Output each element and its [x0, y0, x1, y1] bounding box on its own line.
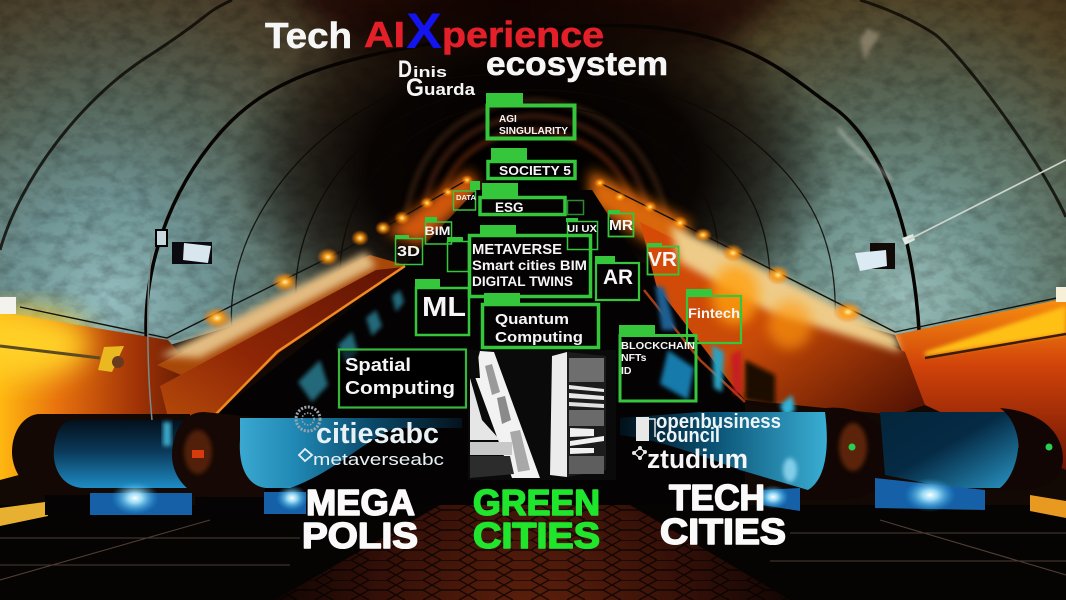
- small empty box left of Metaverse: [447, 237, 468, 272]
- author: Dinis Guarda: inis: [413, 64, 447, 81]
- box: Metaverse: DIGITAL TWINS: [472, 274, 573, 289]
- box: Metaverse: METAVERSE: [472, 241, 562, 258]
- centre hex paving: [275, 505, 790, 600]
- white wall light right edge: [1056, 287, 1066, 302]
- escalator unit 4: [875, 408, 1063, 512]
- left red escalator panel: [160, 267, 404, 425]
- far orange tunnel rings: [405, 100, 668, 222]
- left escalator rail: [216, 266, 405, 414]
- box: Fintech: Fintech: [688, 305, 740, 321]
- outer arch rib: [0, 0, 1066, 250]
- author: Dinis Guarda: uarda: [424, 80, 476, 99]
- logo: citiesabc: [296, 407, 439, 450]
- escalator unit 3: [620, 408, 893, 511]
- left wall lamp: [156, 230, 212, 264]
- box: 3D: [395, 235, 422, 264]
- author: Dinis Guarda: [398, 56, 476, 102]
- box: Data: DATA: [456, 195, 476, 202]
- box: Quantum Computing: [482, 293, 598, 348]
- right concrete wall: [530, 0, 1066, 335]
- tunnel depth shadow: [233, 0, 833, 368]
- box: AGI singularity: [486, 93, 574, 138]
- logo: citiesabc: citiesabc: [316, 418, 439, 450]
- right cream floor edge: [1030, 495, 1066, 518]
- heading: Green Cities: GREEN: [473, 482, 600, 523]
- letter I tower: [550, 352, 606, 477]
- box: Metaverse: [470, 225, 590, 296]
- white wall light left edge: [0, 297, 16, 314]
- box: Blockchain NFTs ID: ID: [621, 365, 632, 377]
- concrete mottling: [0, 0, 1066, 340]
- left escalator blue steps: [298, 290, 404, 402]
- right escalator rail: [644, 290, 745, 402]
- box: UI UX: UI UX: [567, 223, 597, 235]
- right escalator panel: [640, 222, 925, 415]
- small empty box beside ESG: [568, 200, 584, 214]
- title: perience: [442, 14, 604, 55]
- right yellow band: [925, 306, 1066, 356]
- author: Dinis Guarda: D: [398, 56, 412, 83]
- box: ESG: [480, 183, 565, 215]
- left floor lines: [0, 520, 1066, 580]
- right orange hot spots: [711, 265, 759, 325]
- heading: Mega Polis: [302, 482, 418, 556]
- box: ML: [415, 279, 469, 335]
- box: AGI singularity: SINGULARITY: [499, 126, 568, 137]
- box: MR: [608, 210, 634, 236]
- title: ecosystem: [486, 45, 668, 82]
- logo: open business council: openbusiness: [656, 411, 781, 433]
- right wall cable: [908, 160, 1066, 240]
- box: AR: AR: [603, 266, 633, 289]
- left cream band: [157, 255, 405, 395]
- box: Blockchain NFTs ID: [619, 325, 696, 401]
- right wall lamp: [855, 234, 915, 271]
- left concrete wall: [0, 0, 540, 345]
- logo: open business council: council: [656, 425, 720, 447]
- box: ML: ML: [422, 291, 466, 322]
- left cream floor edge: [0, 502, 48, 526]
- title: AI: [364, 14, 405, 55]
- box: AR: [595, 256, 639, 300]
- box: Data: [454, 181, 480, 210]
- title: [265, 3, 668, 82]
- box: VR: VR: [648, 249, 678, 271]
- box: Quantum Computing: Computing: [495, 329, 583, 346]
- heading: Tech Cities: [660, 477, 786, 552]
- box: VR: [647, 243, 678, 274]
- heading: Mega Polis: MEGA: [306, 482, 415, 523]
- box: ESG: ESG: [495, 200, 524, 215]
- box: Spatial Computing: [339, 350, 466, 408]
- logo: ztudium: ztudium: [647, 444, 748, 474]
- inner arch ribs: [231, 75, 835, 330]
- logo: metaverseabc: metaverseabc: [313, 450, 445, 469]
- right cream band: [670, 225, 900, 352]
- left handrail and yellow bracket: [0, 346, 124, 372]
- white concrete scar: [838, 128, 892, 180]
- ceiling cable on left rib: [148, 250, 152, 420]
- box: Spatial Computing: Spatial: [345, 355, 411, 375]
- escalator unit 1: [12, 414, 192, 515]
- left lower wall: [0, 312, 230, 480]
- logo: open business council: [636, 411, 781, 447]
- amber lights: [202, 175, 863, 329]
- letter A: [470, 351, 540, 478]
- wall rail lines: [20, 180, 1066, 358]
- heading: Mega Polis: POLIS: [302, 515, 418, 556]
- heading: Tech Cities: TECH: [669, 477, 765, 518]
- logo: metaverseabc: [299, 449, 445, 469]
- orange glow near vanishing point: [385, 170, 480, 245]
- title: X: [406, 3, 442, 59]
- box: Blockchain NFTs ID: NFTs: [621, 352, 647, 364]
- box: BIM: [424, 217, 452, 244]
- right lower wall: [895, 298, 1066, 470]
- main arch rib: [146, 25, 920, 400]
- heading: Green Cities: [473, 482, 600, 556]
- box: AGI singularity: AGI: [499, 114, 517, 125]
- title: Tech: [265, 15, 352, 56]
- top ceiling shade: [280, 0, 800, 50]
- box: BIM: BIM: [424, 224, 450, 238]
- author: Dinis Guarda: G: [406, 74, 424, 102]
- box: Fintech: [686, 289, 741, 343]
- heading: Green Cities: CITIES: [473, 515, 600, 556]
- escalator unit 2: [172, 412, 462, 517]
- yellow wall glow: [0, 311, 90, 379]
- right escalator passengers: [655, 285, 795, 418]
- box: UI UX: [566, 218, 598, 250]
- AI logo: [468, 350, 616, 480]
- heading: Tech Cities: CITIES: [660, 511, 786, 552]
- box: MR: MR: [609, 217, 633, 234]
- central escalator well: [216, 190, 745, 505]
- box: Blockchain NFTs ID: BLOCKCHAIN: [621, 340, 695, 352]
- box: Society 5: [488, 148, 575, 178]
- box: Metaverse: Smart cities BIM: [472, 257, 587, 273]
- box: 3D: 3D: [397, 243, 420, 260]
- box: Spatial Computing: Computing: [345, 378, 455, 398]
- floor: [0, 505, 1066, 600]
- box: Quantum Computing: Quantum: [495, 311, 569, 328]
- box: Society 5: SOCIETY 5: [499, 163, 571, 178]
